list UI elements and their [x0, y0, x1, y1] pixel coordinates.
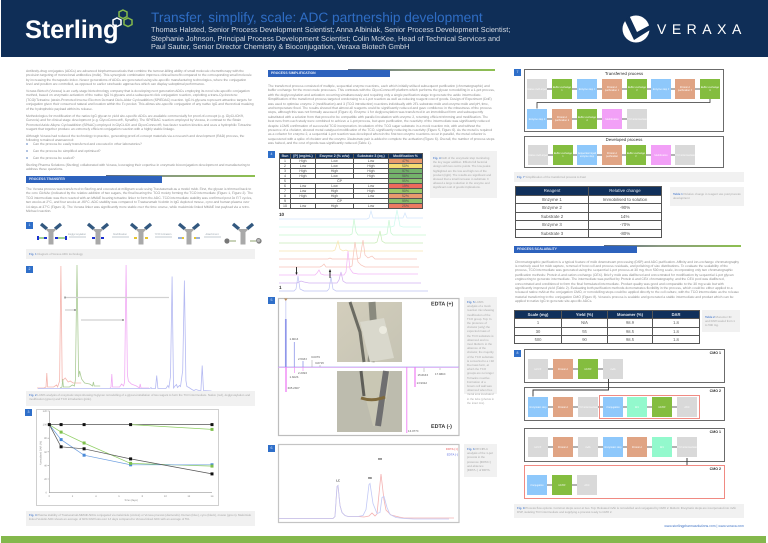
figure 4b: stacked NMR spectra: 10: [279, 212, 285, 217]
figure 8 caption: [514, 504, 744, 518]
table 1: reagent changes: Substrate 3: [541, 231, 563, 236]
figure 4: DoE results table: Low: [300, 164, 306, 168]
figure 7: transferred process flow: Buffer exchange 3: [701, 86, 719, 92]
bullet list: Can the process be easily transferred and executed in other laboratories?: [33, 142, 142, 146]
figure 3: plasma stability line chart: 10: [164, 495, 167, 498]
MS sticks: EDTA plus: [286, 300, 440, 372]
authors: [151, 25, 510, 51]
figure 4: DoE results table: 9: [284, 199, 286, 203]
figure 8: option B CMO 2: UF/DF: [558, 484, 566, 486]
figure 6: HPLC overlay: LC: [336, 478, 341, 482]
figure 3: plasma stability line chart: 20: [44, 478, 48, 481]
figure 4: DoE results table: Run: [282, 154, 288, 158]
table 2: scale results: Yield (%): [576, 312, 593, 317]
figure 1: antibody reaction scheme: Deglycosylation: [68, 233, 87, 236]
figure 4: DoE results table: 3: [284, 169, 286, 173]
figure 4: DoE results table: High: [367, 164, 375, 168]
figure 5: MS chromatogram with tube photos: 2.5944: [298, 357, 307, 361]
arrows: [548, 406, 677, 408]
figure 5: MS chromatogram with tube photos: 305.2307: [288, 386, 300, 390]
figure 4: DoE results table: 97%: [402, 169, 409, 173]
figure 6 badge: [268, 445, 275, 452]
figure 5: MS chromatogram with tube photos: 1.6026: [290, 375, 299, 379]
figure 4: DoE results table: Low: [331, 164, 338, 168]
figure 3: plasma stability line chart: 12: [187, 495, 191, 498]
text: process transfer: The Veraxa process was transferred to Sterling and executed at milligram scale using Trastuzumab as a model mAb. First, the glycan is trimmed back to the core GlcNAc (indicated by the relative addition of two sugars, the final bearing the TCO moiety forming the TCO intermediate (Figure 1, Figure 2). The TCO intermediate was then reacted with an MMAE bearing tetrazine linker to form the ADC. TCO intermediate stability was confirmed post 3x F/T cycles, two weeks at 2°C, and four weeks at -80°C. ADC stability was compared to Trastuzumab Vedotin in IgG depleted mouse, cyno and human plasma over 14 days at 37°C (Figure 3). The Veraxa linker was significantly more stable over the time course, while maleimide linked MMAE lost payload via a retro-Michael reaction.: [26, 187, 253, 213]
authors: Stephanie Johnson, Principal Process Development Scientist; Colin McKee, Head of Technical Services and: [151, 34, 500, 43]
photo: EDTA minus: [337, 371, 402, 432]
table 2 caption: [702, 310, 740, 332]
figure 7: developed process flow: Sequential liquid enzyme step: [578, 152, 596, 158]
figure 8: option B CMO 2: [524, 465, 725, 499]
figure 7: transferred process flow: Protein A purification 1: [605, 86, 619, 92]
figure 7: transferred process flow: Native mAb input: [527, 88, 547, 90]
figure 3 caption: [26, 511, 255, 526]
figure 5: MS chromatogram with tube photos: 17.8864: [435, 372, 446, 376]
figure 5: MS chromatogram with tube photos: 3.0079: [311, 355, 320, 359]
figure 4 badge: [268, 151, 275, 158]
figure 8: option A CMO 2: Conjugation: [606, 406, 620, 408]
figure 7 caption: Fig. 7 Simplification of the transferred process to Fast: [517, 175, 586, 179]
table 1: reagent changes: Immobilised to solution: [603, 197, 647, 202]
trace: EDTA plus: [279, 474, 454, 518]
figure 5: MS chromatogram with tube photos: 13.9774: [408, 429, 419, 433]
series: blue: [49, 425, 212, 465]
figure 7: developed process flow: Buffer exchange 1: [554, 152, 572, 158]
figure 8: option B CMO 1: CMO 1: [710, 430, 721, 434]
table 1: reagent changes: 14%: [621, 214, 629, 219]
figure 3: plasma stability line chart: 120: [43, 410, 48, 413]
figure 4: DoE results table: High: [299, 194, 307, 198]
figure 7: developed process flow: Protein A purification: [606, 152, 618, 158]
MS sticks: EDTA minus: [286, 367, 415, 433]
figure 3: plasma stability line chart: Time (days): [124, 499, 138, 502]
figure 4: DoE results table: Low: [300, 204, 306, 208]
table 2: scale results: 1: [537, 320, 539, 325]
figure 3 badge: [25, 409, 32, 416]
figure 8: option B CMO 1: Enzymatic step: [605, 446, 621, 448]
trace: blue: [38, 276, 212, 391]
figure 4: DoE results table: 95%: [402, 179, 409, 183]
figure 8: option A CMO 2: [524, 387, 725, 421]
table 1: reagent changes: [515, 186, 662, 238]
figure 4: DoE results table: 5: [284, 179, 286, 183]
figure 4: DoE results table: Low: [300, 189, 306, 193]
table 1 caption: Table 1 Relative change in reagent use post process development: [673, 192, 741, 200]
table 2: scale results: 98.5: [626, 329, 634, 334]
legend: EDTA (+): [446, 447, 458, 451]
figure 3: plasma stability line chart: 40: [44, 464, 48, 467]
figure 8: option B CMO 2: Conjugation: [530, 484, 544, 486]
figure 8 badge: [514, 350, 521, 357]
figure 5: MS chromatogram with tube photos: 2.2093: [298, 371, 307, 375]
table 1: reagent changes: Enzyme 2: [542, 205, 562, 210]
figure 4: DoE results table: 1: [284, 159, 286, 163]
figure 3: plasma stability line chart: 14: [211, 495, 214, 498]
figure 8: option A CMO 2: Enzymatic step: [530, 406, 546, 408]
authors: Thomas Halsted, Senior Process Development Scientist; Anna Albiniak, Senior Process Development Scientist;: [151, 25, 510, 34]
figure 4: DoE results table: 50%: [402, 164, 409, 168]
marker dot: [256, 238, 261, 243]
heading: process scalability: PROCESS SCALABILITY: [517, 247, 557, 251]
figure 4: DoE results table: 47%: [402, 159, 409, 163]
series: green upper: [131, 425, 212, 429]
figure 4: DoE results table: [P] (mg/mL): [293, 154, 313, 158]
icon: Sterling hexagons: [112, 9, 133, 28]
figure 4: DoE results table: Modification %: [393, 154, 418, 158]
figure 4: DoE results table: 99%: [402, 199, 409, 203]
arrows: [548, 154, 675, 156]
figure 4: DoE results table: High: [331, 194, 338, 198]
trace: magenta: [110, 265, 149, 388]
figure 7: transferred process flow: Modification: [605, 118, 619, 120]
heading: process transfer: PROCESS TRANSFER: [29, 177, 65, 181]
table 1: reagent changes: Enzyme 3: [542, 222, 562, 227]
figure 5: MS chromatogram with tube photos: [278, 298, 460, 436]
table 2: scale results: 500: [535, 337, 541, 342]
figure 5 badge: [268, 297, 275, 304]
table 1: reagent changes: -90%: [620, 205, 630, 210]
figure 8: option B CMO 1: Protein A: [632, 446, 642, 448]
figure 8: option A CMO 2: UF/DF: [658, 406, 666, 408]
table 2: scale results: 90: [582, 337, 587, 342]
figure 8: option A CMO 2: CMO 2: [710, 389, 721, 393]
figure 7 badge: [514, 69, 521, 76]
bullet list: ◘: [26, 156, 28, 160]
figure 1 badge: 1: [29, 223, 30, 227]
figure 4: DoE results table: 90%: [402, 189, 409, 193]
figure 7: developed process flow: Modification: [654, 154, 668, 156]
figure 8: option A CMO 2: ADC: [684, 406, 690, 408]
figure 6 caption: Fig. 6 RP-HPLC analysis of the 1-pot process in the presence (EDTA+) and absence (EDTA−) of EDTA.: [467, 447, 493, 472]
figure 7: developed process flow: Buffer exchange 2: [627, 152, 645, 158]
figure 8: option A CMO 2: Protein A: [558, 406, 568, 408]
figure 4: DoE results table: High: [331, 189, 338, 193]
figure 4: DoE results table: Low: [331, 159, 338, 163]
connector: CMO 1 to CMO 2: [532, 379, 609, 396]
figure 7: transferred process flow: Buffer exchange 1: [553, 86, 571, 92]
figure 7: transferred process flow: Buffer exchange 4: [578, 116, 596, 122]
figure 6 badge: 6: [271, 446, 272, 450]
icon: Veraxa mark: [622, 16, 650, 42]
logo: Sterling: Sterling: [25, 16, 118, 44]
figure 8: option B CMO 1: TCO intermediate: [677, 446, 697, 448]
series: black lower: [49, 425, 212, 474]
figure 4: DoE results table: Low: [331, 174, 338, 178]
figure 8: option A CMO 1: Protein A: [558, 368, 568, 370]
bullet list: ◘: [26, 142, 28, 146]
figure 4: DoE results table: Low: [331, 184, 338, 188]
figure 7: transferred process flow: Protein A purification 2: [678, 86, 692, 92]
figure 1 caption: Fig. 1 Diagram of Veraxa ADC technology: [29, 252, 83, 256]
legend: [446, 447, 458, 456]
figure 8: option B CMO 1: IEX: [660, 446, 664, 448]
figure 1: antibody reaction scheme: Modification: [113, 233, 127, 236]
figure 4: DoE results table: Enzyme 2 (% w/w): [320, 154, 349, 158]
introduction text: [26, 69, 254, 171]
figure 4: DoE results table: High: [299, 159, 307, 163]
connector: CMO 1 to CMO 2 lower: [686, 458, 688, 465]
figure 4: DoE results table: 2: [284, 164, 286, 168]
figure 5: MS chromatogram with tube photos: 3.8715: [315, 361, 324, 365]
figure 6: HPLC overlay: HH: [378, 457, 382, 461]
text: process simplification: The transferred process consisted of multiple, sequential enzyme reactions, each which initially utilised subsequent purification (chromatographic) and buffer exchange for the most crude processes. This contrasts with the GlycoConnect® platform which performs the glycan remodelling in a 1-pot process, with the deglycosylation and activation occurring simultaneously and requiring only a single purification stage to generate the azide intermediate. Simplification of the transferred process targeted condensing to a 1-pot reaction as well as reducing reagent cost of goods. Design of Experiment (DoE) was used to optimise enzyme 2 (modification) and 3 (TCO introduction) reactions individually with 2FL substrate:mAb and enzyme:mAb and pH, time, and temperature fixed. The results showed that almost all reagents could be significantly reduced and gave confidence in the robustness of the process steps, although this was not formally assessed (Figure 4). Enzyme 1 for deglycosylation was transferred in an immobilised form and subsequently substituted with a solution from that proved to be compatible with parallel incubation with enzyme 2, returning efficient trimming and modification. The best runs from each study were combined to achieve a 1-pot process, but upon purification, the reactivity of the intermediate was significantly reduced despite LCMS confirmation of successful TCO incorporation. Incubation of the TCO sugar substrate in a mock reaction mix, with and without the presence of a chelator, showed metal catalysed modification of the TCO, significantly reducing its reactivity (Figure 5, Figure 6). As the metal is required as a cofactor for enzyme 2, a sequential 1-pot reaction was developed wherein the first two enzyme reactions occur in parallel, the metal cofactor is sequestered with a spike of chelator and the enzyme 3/substrate pair is added to complete the activation (Figure 6). Overall, the number of process steps was halved, and the cost of goods was significantly reduced (Table 1).: [268, 84, 495, 145]
figure 7: transferred process flow: TCO intermediate: [627, 118, 647, 120]
table 2: scale results: DAR: [672, 312, 680, 317]
figure 4: DoE results table: [279, 153, 423, 209]
figure 8: option A CMO 1: mAb: [610, 368, 616, 370]
table 2: scale results: Scale (mg): [528, 312, 548, 317]
figure 8 badge: 8: [517, 351, 518, 355]
figure 4 caption: Fig. 4 DoE of the enzymatic step monitoring the key sugar addition. Effects full factorial design with two centre points. The low peaks highlighted are the low and high run of the product (right). The results are significant and showed that a small increase in substrate 3 allowed a large reduction in the enzyme and significant cost of goods implications.: [433, 156, 491, 189]
figure 8: option B CMO 1: [524, 428, 725, 462]
figure 4: DoE results table: 25%: [402, 204, 409, 208]
figure 3: plasma stability line chart: 80: [44, 437, 48, 440]
footer links: www.sterlingpharmasolutions.com | www.veraxa.com: [664, 524, 744, 528]
figure 1: antibody reaction scheme: Attachment: [205, 233, 219, 236]
figure 8 caption: Fig. 8 Process flow options. Common steps occur at two. Top: Released mAb is remodelled and conjugated by CMO 2. Bottom: Enzymatic steps are incorporated into mAb DSP, isolating TCO intermediate and supplying a process ready to CMO 2.: [517, 506, 736, 514]
photo: EDTA plus: [337, 302, 402, 362]
figure 4: DoE results table: Low: [300, 184, 306, 188]
paragraph: Veraxa: Veraxa Biotech (Veraxa) is an early-stage biotechnology company that is developing next generation ADCs employing its novel site-specific conjugation method, based on enzymatic activation of the native IgG N-glycans and a subsequent click conjugation reaction, exploiting a trans-Cyclooctene (TCO)/Tetrazine (strain-Promoted Inverse Electron Demand Diels-Alder Cycloaddition (SPIEDAC) reaction. IgG N-glycans represent attractive targets for conjugation given their conserved natural and location within the Fc pocket. This allows site-specific conjugation of any native IgG and theoretical masking of the hydrophobic payload within its release.: [26, 89, 254, 111]
figure 5 badge: 5: [271, 298, 272, 302]
table 2: scale results: 1.8: [673, 329, 679, 334]
figure 3: plasma stability line chart: 60: [44, 451, 48, 454]
figure 7: transferred process flow: Protein A purification 3: [555, 116, 569, 122]
figure 4: DoE results table: Low: [368, 194, 374, 198]
figure 4: DoE results table: 8: [284, 194, 286, 198]
paragraph: open questions: Although Veraxa had reduced the technology to practice, generating proof-of-concept materials via a research and development (R&D) process, the following remained unanswered:: [26, 134, 244, 142]
figure 2 badge: 2: [29, 267, 30, 271]
figure 7: developed process flow: Native mAb input: [528, 154, 548, 156]
legend: EDTA (-): [447, 452, 458, 456]
table 2: scale results: [514, 310, 700, 344]
figure 4b: stacked NMR spectra: 1: [279, 285, 282, 290]
bullet list: Can the process be simplified and optimised?: [33, 149, 100, 153]
table 2: scale results: 30: [536, 329, 540, 334]
figure 1 caption: [26, 249, 255, 259]
table 2: scale results: 1.8: [673, 320, 679, 325]
figure 7: transferred process flow: Transferred process: [605, 71, 643, 76]
figure 8: option B CMO 2: CMO 2: [710, 467, 721, 471]
bullet list: ◘: [26, 149, 28, 153]
figure 7: transferred process flow: Buffer exchange 2: [628, 86, 646, 92]
table 2: scale results: 55: [582, 329, 587, 334]
figure 8: option B CMO 2: ADC: [584, 484, 590, 486]
figure 4: DoE results table: High: [299, 174, 307, 178]
figure 8: option A CMO 1: UF/DF: [584, 368, 592, 370]
figure 7: developed process flow: [524, 136, 724, 168]
paragraph: collaboration: Sterling Pharma Solutions (Sterling) collaborated with Veraxa, leveraging their expertise in enzymatic bioconjugation development and manufacturing to address these questions.: [26, 163, 250, 171]
table 2: scale results: 98.9: [626, 320, 634, 325]
table 1 caption: [670, 187, 744, 206]
figure 4 badge: 4: [271, 152, 272, 156]
figure 5 caption: Fig. 5 LCMS analysis of a mock reaction mix showing modification of the TCO group. Top: In the presence of chelator (only) the expected mass of the TCO substrate is observed and no mod. Bottom: in the absence of the chelator, the majority of the TCO substrate is converted to a +18 Da mass form, at which the TCO groups are no longer Tetrazine reactive. Formation of a brown cell wall was observed when free metal ions incubated in the tube (photos in the inset mix).: [467, 300, 494, 405]
figure 3: plasma stability line chart: 0: [46, 492, 48, 494]
figure 8: option B CMO 1: HCCF: [535, 446, 541, 448]
header banner: [1, 0, 768, 57]
paragraph: methodologies: Methodologies for modification of the native IgG glycan to yield site-specific ADCs are available commercially for proof-of-concept (e.g. GlyCLICK®, Genovis) and for clinical stage development (e.g. GlycoConnect®, Synaffix). The SPIEDAC reaction employed by Veraxa, in contrast to the Strain Promoted Azide Alkyne Cycloaddition (SPAAC) employed in GlyCLICK and GlycoConnect®, has faster reaction kinetics and uses a hydrophilic Tetrazine reagent that together produce an extremely efficient conjugation reaction with a highly stable linkage.: [26, 114, 251, 131]
figure 5: MS chromatogram with tube photos: 15.8643: [418, 373, 428, 377]
figure 4: DoE results table: Low: [368, 204, 374, 208]
figure 8: option B CMO 1: Protein A: [558, 446, 568, 448]
figure 8: option A CMO 1: HCCF: [535, 368, 541, 370]
trace: green: [60, 265, 100, 388]
figure 4: DoE results table: Low: [368, 159, 374, 163]
table 2: scale results: 1.8: [673, 337, 679, 342]
figure 4: DoE results table: High: [331, 204, 338, 208]
figure 4b: stacked NMR spectra: [279, 210, 428, 292]
table 1: reagent changes: Reagent: [544, 188, 560, 193]
figure 6: HPLC overlay: HE: [368, 476, 372, 480]
figure 3: plasma stability line chart: 0: [49, 495, 51, 498]
figure 7: transferred process flow: Enzyme step 1: [579, 88, 595, 90]
text: process scalability: Chromatographic purification is a typical feature of mAb downstream processing (DSP) and ADC purification. Affinity and ion-exchange chromatography is routinely used for mAb capture, removal of host cell and process residuals, and polishing of size distributions. To evaluate the scalability of the process, TCO intermediate was generated using the sequential 1-pot process at 30 mg, then 500 mg scale, incorporating only two chromatographic purification methods: Protein A and cation exchange (CEX). Brief y mAb was diafiltered and concentrated for modification by sequential 1-pot glycan engineering to generate intermediate. The intermediate was purified by Protein A and CEX chromatography, and the CEX pool was diafiltered, concentrated and conditioned to form the final formulated intermediate. Product quality was good and comparable to the 30 mg scale but with significantly improved yield (Table 2). Evaluating both purification methods demonstrates flexibility in the process, which could be either applied to a released native mAb at the conjugation CMO, or remodelling steps could be applied directly to the cell culture, with the TCO intermediate as the release material transferring to the conjugation CMO (Figure 8). Veraxa's process is scalable and generated a stable intermediate and product which can be applied to native IgG to generate site-specific ADCs.: [515, 260, 739, 303]
figure 6 caption: [464, 444, 497, 477]
figure 4: DoE results table: Low: [368, 184, 374, 188]
figure 4: DoE results table: High: [299, 169, 307, 173]
figure 4: DoE results table: 98%: [402, 174, 409, 178]
figure 3: plasma stability line chart: Normalised DAR (%): [40, 441, 42, 465]
figure 4: DoE results table: High: [367, 169, 375, 173]
table 1: reagent changes: Substrate 2: [541, 214, 563, 219]
series: top control: [49, 424, 212, 426]
figure 2 caption: Fig. 2 LCMS analysis of enzymatic steps showing N-glycan remodelling of a glycan-installation of two sugars to form the TCO intermediate. Native (red), deglycosylation and modification (green) and TCO introduction (pink).: [29, 393, 250, 401]
arrows: [548, 368, 603, 370]
table 1: reagent changes: Enzyme 1: [542, 197, 562, 202]
highlight: conjugation steps: [599, 395, 700, 419]
trace: EDTA minus: [279, 484, 449, 519]
retention time spans: [65, 298, 169, 320]
authors: Paul Sauter, Senior Director Chemistry & Bioconjugation, Veraxa Biotech GmbH: [151, 42, 409, 51]
figure 7 caption: [514, 172, 744, 182]
table 2 caption: Table 2 Monomer ID and DAR scaled from 1 to 500 mg.: [705, 315, 735, 327]
logo: Veraxa: [622, 16, 747, 42]
figure 2: LCMS stacked traces: [37, 265, 212, 391]
heading: process simplification: PROCESS SIMPLIFICATION: [271, 71, 316, 75]
figure 4: DoE results table: High: [367, 174, 375, 178]
figure 4 caption: [430, 151, 497, 198]
figure 1: antibody reaction scheme: [37, 222, 262, 244]
figure 4: DoE results table: 7: [284, 189, 286, 193]
table 1: reagent changes: -80%: [620, 231, 630, 236]
figure 4: DoE results table: 10: [283, 204, 287, 208]
figure 4: DoE results table: High: [331, 169, 338, 173]
figure 8: option B CMO 1: mAb: [585, 446, 591, 448]
figure 7: developed process flow: Developed process: [606, 137, 642, 142]
figure 3: plasma stability line chart: 8: [142, 495, 144, 498]
figure 4: DoE results table: Substrate 3 (eq.): [357, 154, 385, 158]
figure 7: developed process flow: TCO intermediate: [675, 154, 695, 156]
figure 7: transferred process flow: [524, 69, 724, 132]
figure 4: DoE results table: High: [367, 189, 375, 193]
figure 4: DoE results table: CP: [337, 179, 342, 183]
figure 4: DoE results table: 6: [284, 184, 286, 188]
figure 4: DoE results table: CP: [337, 199, 342, 203]
table 2: scale results: N/A: [581, 320, 588, 325]
table 2: scale results: Monomer (%): [617, 312, 643, 317]
figure 2 caption: [26, 391, 255, 406]
figure 4: DoE results table: 52%: [402, 194, 409, 198]
figure 4: DoE results table: 4: [284, 174, 286, 178]
figure 5: MS chromatogram with tube photos: 1.8014: [290, 337, 299, 341]
label: EDTA minus: EDTA (-): [431, 424, 452, 430]
figure 3: plasma stability line chart: 6: [118, 495, 120, 498]
figure 3: plasma stability line chart: 100: [43, 424, 48, 427]
figure 7 badge: 7: [517, 70, 518, 74]
paragraph: ADC background: Antibody-drug conjugates (ADCs) are advanced biopharmaceuticals that combine the tumour-killing ability of small molecule chemotherapy with the precision targeting of monoclonal antibodies (mAb). This synergistic combination improves clinical benefit compared to the corresponding small molecule by increasing the therapeutic index. Newer generations of ADCs are generated using site-specific manufacturing technologies, where the conjugation level and position are controlled, as opposed to earlier stochastic approaches which can display suboptimal performance.: [26, 69, 252, 86]
figure 3 badge: 3: [28, 410, 29, 414]
figure 3: plasma stability line chart: 4: [95, 495, 97, 498]
figure 1 badge: [26, 222, 33, 229]
footer bar: [1, 536, 766, 543]
figure 3: plasma stability line chart: 2: [72, 495, 74, 498]
figure 2 badge: [26, 266, 33, 273]
title: Transfer, simplify, scale: ADC partnership development: [151, 10, 483, 25]
figure 4: DoE results table: 19%: [402, 184, 409, 188]
arrows: [547, 484, 577, 486]
figure 5: MS chromatogram with tube photos: 14.9912: [416, 381, 427, 385]
arrows: [536, 88, 710, 120]
figure 7: transferred process flow: Enzyme step 3: [529, 118, 545, 120]
figure 8: option A CMO 2: IEX: [635, 406, 639, 408]
label: EDTA plus: EDTA (+): [431, 302, 454, 308]
figure 6: HPLC overlay: [278, 444, 460, 524]
figure 8: option A CMO 1: [524, 349, 725, 383]
table 1: reagent changes: Relative change: [609, 188, 641, 193]
figure 7: transferred process flow: Enzyme step 2: [653, 88, 669, 90]
table 1: reagent changes: -70%: [620, 222, 630, 227]
figure 3 caption: Fig. 3 Plasma stability of Trastuzumab-MMAE ADCs conjugated via maleimide (circles) or Veraxa process (diamonds). Human (blue), cyno (black), mouse (green). Maleimide linked Vedotin ADC shows an average of 60% DAR loss over 14 days compared to Veraxa linked ADC with an average of 5%.: [29, 513, 251, 521]
figure 1: antibody reaction scheme: TCO formation: [154, 233, 172, 236]
series: green lower: [49, 425, 212, 466]
figure 8: option A CMO 1: CMO 1: [710, 351, 721, 355]
arrows: [548, 446, 677, 448]
bullet list: [26, 142, 142, 160]
trace: red: [37, 266, 81, 388]
bullet list: Can the process be scaled?: [33, 156, 74, 160]
wordmark: VERAXA: [657, 21, 747, 37]
figure 3: plasma stability line chart: [36, 409, 219, 506]
table 2: scale results: 98.5: [626, 337, 634, 342]
figure 8: option A CMO 2: TCO intermediate: [578, 406, 598, 408]
